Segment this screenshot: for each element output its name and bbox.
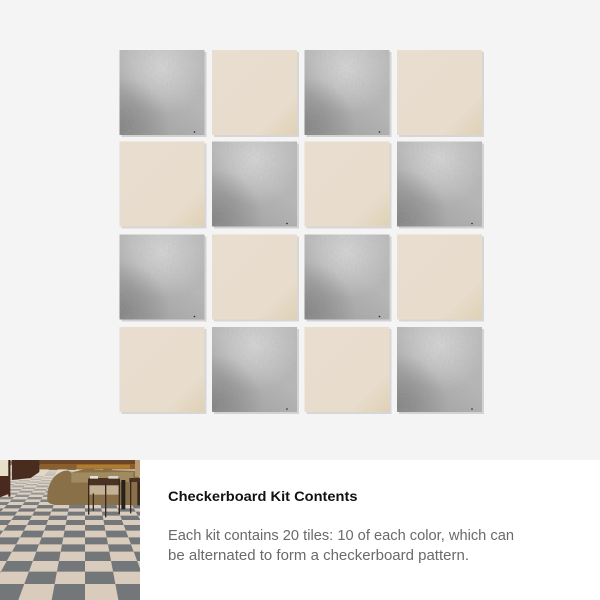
row 3 tiles (120, 234, 484, 322)
lower text panel (168, 488, 514, 564)
room photo: checkerboard floor with sofa (0, 460, 140, 600)
description text: Each kit contains 20 tiles: 10 of each color, which can (168, 528, 514, 544)
left wall cream panel (0, 460, 8, 477)
left cabinets (12, 460, 39, 480)
row 1 tiles (120, 50, 484, 137)
tile grid (120, 50, 484, 414)
row 4 tiles (120, 327, 484, 414)
back wall (33, 460, 140, 465)
floor: alternate columns (0, 460, 140, 584)
heading: Checkerboard Kit Contents (168, 488, 358, 504)
description text: be alternated to form a checkerboard pattern. (168, 548, 469, 564)
far floor fade (0, 470, 140, 507)
right column (135, 460, 140, 477)
upper background panel (0, 0, 600, 460)
description text (168, 528, 514, 564)
dining table and chairs (88, 476, 140, 517)
sofa (47, 469, 140, 505)
row 2 tiles (120, 142, 484, 228)
